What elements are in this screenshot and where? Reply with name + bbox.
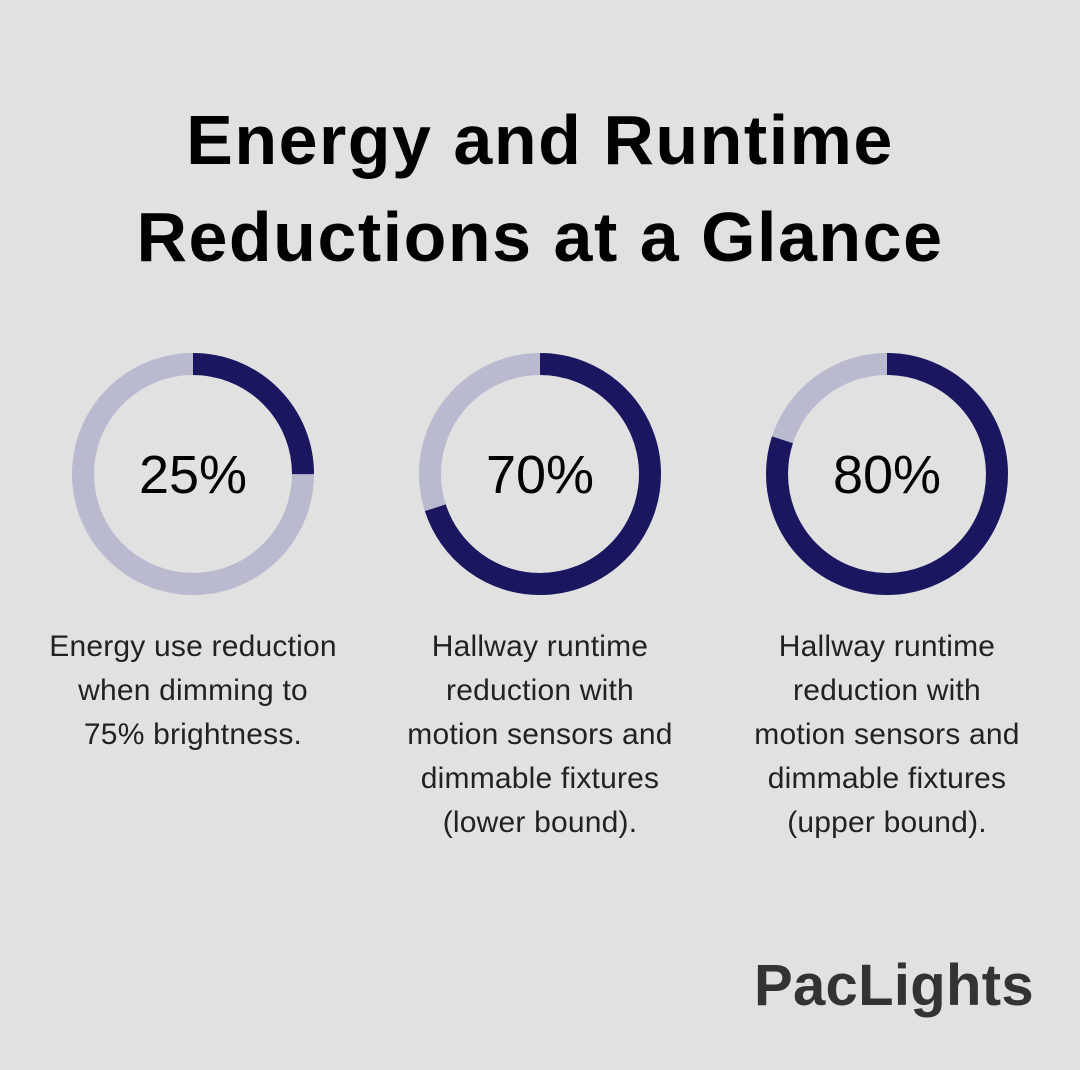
description 1: 75% brightness.: [84, 718, 302, 751]
logo: PacLights: [754, 953, 1034, 1018]
description 1: when dimming to: [78, 674, 308, 707]
description 2: [407, 630, 673, 839]
description 3: motion sensors and: [754, 718, 1020, 751]
description 3: (upper bound).: [787, 806, 987, 839]
ring: 80%: [766, 353, 1008, 595]
ring: 25%: 25%: [139, 445, 247, 505]
title: Energy and Runtime: [186, 101, 894, 179]
ring: 80%: 80%: [833, 445, 941, 505]
description 2: dimmable fixtures: [421, 762, 659, 795]
title: Reductions at a Glance: [136, 198, 944, 276]
description 3: reduction with: [793, 674, 981, 707]
ring: 70%: [419, 353, 661, 595]
title: [136, 101, 944, 276]
description 1: Energy use reduction: [49, 630, 337, 663]
description 2: (lower bound).: [443, 806, 637, 839]
description 1: [49, 630, 337, 751]
description 2: Hallway runtime: [432, 630, 648, 663]
ring: 25%: [72, 353, 314, 595]
description 3: dimmable fixtures: [768, 762, 1006, 795]
description 2: reduction with: [446, 674, 634, 707]
ring: 70%: 70%: [486, 445, 594, 505]
description 3: Hallway runtime: [779, 630, 995, 663]
description 2: motion sensors and: [407, 718, 673, 751]
description 3: [754, 630, 1020, 839]
